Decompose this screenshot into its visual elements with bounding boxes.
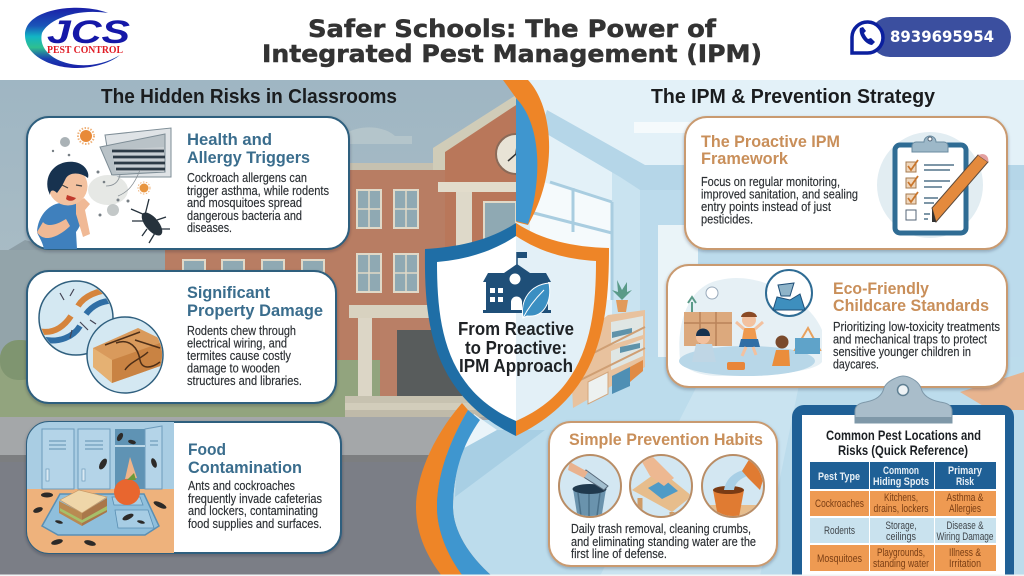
heading: right section: The IPM & Prevention Strategy [651,86,936,108]
heading: Significant [187,283,270,302]
table title [826,427,981,458]
table: pest locations and risks: Common [883,465,919,477]
table: pest locations and risks: drains, lockers [874,503,929,515]
logo: JCS Pest Control: PEST CONTROL [47,45,123,56]
body text: Ants and cockroaches [188,479,295,493]
body text: sensitive younger children in [833,345,971,359]
shield text [458,319,574,376]
table: pest locations and risks: ceilings [886,531,916,543]
body text: damage to wooden [187,362,280,376]
icon: chewed wiring [38,281,114,355]
table: pest locations and risks: Disease & [946,520,984,532]
body text: structures and libraries. [187,374,302,388]
table: pest locations and risks: Playgrounds, [877,547,925,559]
table: pest locations and risks: Risk [956,476,975,488]
heading: Property Damage [187,301,323,320]
table title: Risks (Quick Reference) [838,442,968,458]
body text [188,479,322,531]
shield text: IPM Approach [459,356,573,376]
center shield [425,223,609,436]
heading [701,132,840,168]
background: school exterior [0,80,536,576]
heading: Contamination [188,458,302,477]
decorative ring behind shield [416,80,549,576]
icon: trash removal [559,455,621,520]
body text: Cockroach allergens can [187,171,307,185]
body text: diseases. [187,221,232,235]
body text: daycares. [833,358,879,372]
phone contact badge: 8939695954 [890,27,994,46]
body text [571,522,756,561]
icon: coughing boy [37,162,90,249]
title: Integrated Pest Management (IPM) [262,40,762,68]
table: pest locations and risks [810,462,996,571]
body text: pesticides. [701,212,753,226]
body text: Rodents chew through [187,324,296,338]
table: pest locations and risks: Wiring Damage [936,531,994,543]
body text: Focus on regular monitoring, [701,175,840,189]
body text [187,324,302,388]
table: pest locations and risks: Primary [948,465,983,477]
heading [188,440,302,477]
body text: food supplies and surfaces. [188,517,322,531]
phone contact badge [852,17,1011,57]
table: pest locations and risks: Mosquitoes [817,553,862,565]
icon: checklist clipboard and pencil [877,132,988,238]
heading [187,130,310,167]
body text: electrical wiring, and [187,336,287,350]
icon: children playing in a daycare [679,270,822,376]
body text: trigger asthma, while rodents [187,184,329,198]
title [262,15,762,68]
bookshelf [540,280,645,408]
body text: dangerous bacteria and [187,209,302,223]
body text: termites cause costly [187,349,292,363]
heading: Eco-Friendly [833,279,930,298]
icon: clipboard clip [855,376,952,423]
panel: food contamination [27,422,341,553]
body text: improved sanitation, and sealing [701,188,858,202]
table: pest locations and risks: Hiding Spots [873,476,929,488]
shield text: to Proactive: [465,338,567,358]
icon: lockers and lunch tray [27,422,174,553]
body text [701,175,858,226]
panel: eco-friendly childcare standards [667,265,1007,387]
icon: pollen and dust [52,128,150,216]
body text: first line of defense. [571,547,667,561]
logo: JCS Pest Control [25,8,131,68]
body text [833,320,1000,372]
header bar [0,0,1024,80]
heading [833,279,989,315]
table: pest locations and risks: Rodents [824,525,855,537]
icon: school with leaf [483,252,551,318]
background: bright classroom interior [516,80,1024,576]
table: pest locations and risks: Irritation [949,558,981,570]
icon: potted plant [612,280,632,312]
panel: simple prevention habits [549,422,777,566]
panel: health and allergy triggers [27,117,349,249]
table: pest locations and risks: Pest Type [818,471,860,483]
icon: termite-damaged wood [87,317,163,393]
body text: and eliminating standing water are the [571,535,756,549]
body text: and lockers, contaminating [188,504,318,518]
body text: entry points instead of just [701,200,831,214]
title: Safer Schools: The Power of [308,15,717,43]
heading: Simple Prevention Habits [569,430,763,449]
icon: emptying standing water [702,455,766,519]
table title: Common Pest Locations and [826,427,981,443]
heading [187,283,323,320]
table: pest locations and risks: standing water [873,558,929,570]
body text: frequently invade cafeterias [188,492,322,506]
body text: and mosquitoes spread [187,196,302,210]
shield text: From Reactive [458,319,574,339]
table: pest locations and risks: Asthma & [946,492,984,504]
table: pest locations and risks: Illness & [949,547,982,559]
body text: and mechanical traps to protect [833,332,987,346]
body text: Prioritizing low-toxicity treatments [833,320,1000,334]
heading: Allergy Triggers [187,148,310,167]
icon: air vent [100,128,171,177]
panel: quick reference clipboard [792,376,1014,576]
table: pest locations and risks: Cockroaches [815,498,864,510]
panel: proactive IPM framework [685,117,1007,249]
heading: left section: The Hidden Risks in Classrooms [101,86,397,108]
heading: Food [188,440,226,459]
heading: Framework [701,149,789,168]
heading: Childcare Standards [833,296,989,315]
body text [187,171,329,235]
body text: Daily trash removal, cleaning crumbs, [571,522,751,536]
table: pest locations and risks: Allergies [949,503,981,515]
table: pest locations and risks: Kitchens, [884,492,918,504]
heading: The Proactive IPM [701,132,840,151]
icon: cockroach [131,199,170,243]
panel: significant property damage [27,271,336,403]
icon: cleaning crumbs [630,455,692,520]
table: pest locations and risks: Storage, [886,520,916,532]
logo: JCS Pest Control: JCS [47,14,131,50]
heading: Health and [187,130,272,149]
